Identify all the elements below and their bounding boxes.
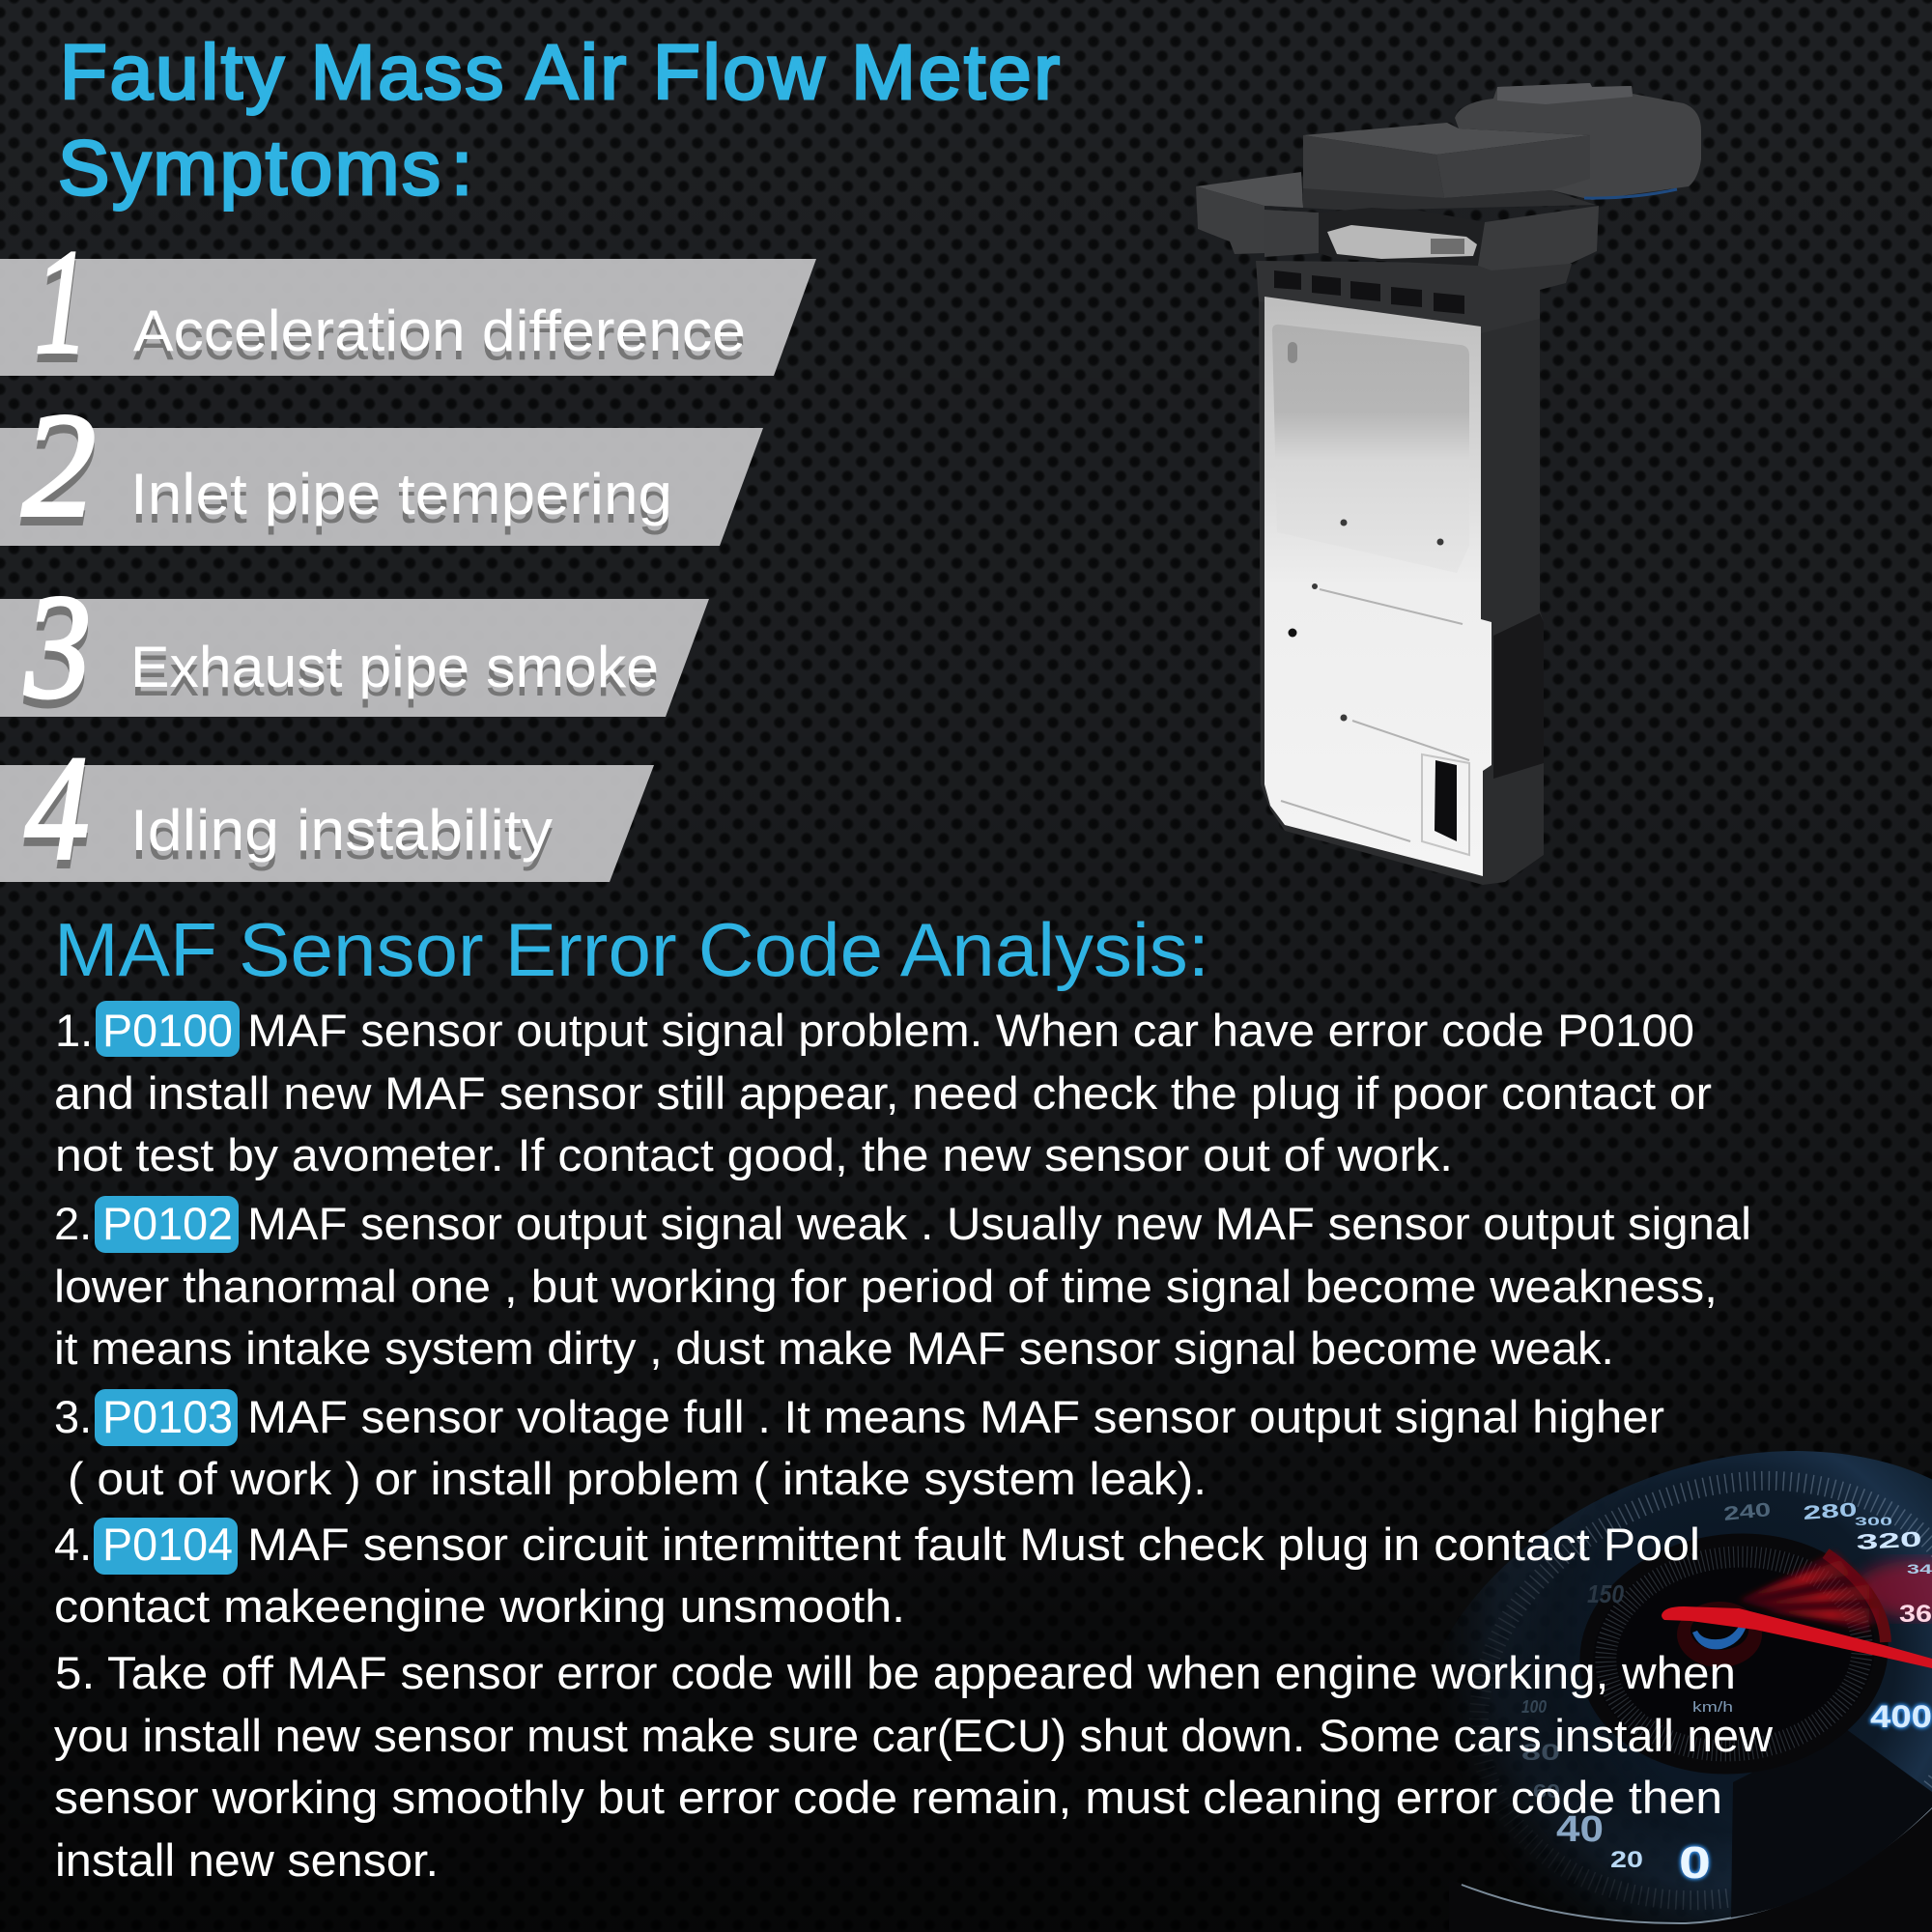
note 5: clearing error codes: 5. Take off MAF sensor error code will be appeared when engine working, when xyxy=(55,1647,1736,1698)
error code 2: P0102: 2. xyxy=(54,1198,92,1249)
title: Faulty Mass Air Flow Meter xyxy=(60,29,1060,115)
symptom 1 xyxy=(0,220,816,393)
error code 2: P0102: it means intake system dirty , dust make MAF sensor signal become weak. xyxy=(54,1322,1614,1374)
error code 3: P0103: ( out of work ) or install problem ( intake system leak). xyxy=(68,1453,1207,1504)
symptom 3: 3 xyxy=(24,565,91,729)
symptom 4 xyxy=(0,726,654,899)
symptom 1: 1 xyxy=(35,229,88,393)
sensor disc xyxy=(1327,225,1477,259)
gauge scale numbers: 300 xyxy=(1855,1515,1893,1528)
gauge scale numbers: 36 xyxy=(1899,1601,1932,1628)
error code 4: P0104 xyxy=(54,1518,1700,1632)
gauge scale numbers: 320 xyxy=(1856,1526,1922,1554)
gauge red ring section xyxy=(1826,1553,1886,1642)
note 5: clearing error codes: you install new sensor must make sure car(ECU) shut down. Some cars install new xyxy=(54,1710,1774,1761)
gauge dark wedge xyxy=(1731,1726,1932,1918)
symptom 4: 4 xyxy=(25,735,89,899)
title xyxy=(58,29,1060,211)
sensor neck with slots xyxy=(1256,261,1572,333)
plate window frame xyxy=(1422,754,1469,855)
gauge red glow at right xyxy=(1855,1560,1932,1618)
error code 1: P0100: not test by avometer. If contact good, the new sensor out of work. xyxy=(55,1129,1453,1180)
gauge needle xyxy=(1662,1606,1932,1668)
symptom 2: 2 xyxy=(22,392,96,556)
plate base xyxy=(1264,297,1492,876)
badge P0103: P0103 xyxy=(102,1391,233,1442)
symptom 1: Acceleration difference xyxy=(133,298,746,363)
plate rivets xyxy=(1288,342,1443,721)
error code 3: P0103 xyxy=(54,1389,1664,1504)
gauge scale numbers: 150 xyxy=(1587,1579,1624,1608)
plate upper panel xyxy=(1272,325,1469,573)
error code 3: P0103: 3. xyxy=(54,1391,92,1442)
error code 1: P0100: 1. xyxy=(55,1005,93,1056)
gauge area below rim xyxy=(1449,1807,1932,1932)
note 5: clearing error codes xyxy=(54,1647,1774,1886)
title: Symptoms xyxy=(58,125,440,211)
gauge tick ring xyxy=(1470,1470,1932,1910)
symptom 3: Exhaust pipe smoke xyxy=(130,643,659,708)
sensor metal plate xyxy=(1264,297,1492,876)
symptom 2: Inlet pipe tempering xyxy=(130,470,672,535)
error code 2: P0102 xyxy=(54,1196,1751,1374)
gauge scale numbers: 400 xyxy=(1870,1699,1932,1734)
gauge scale numbers: 280 xyxy=(1803,1499,1858,1524)
gauge scale numbers: 20 xyxy=(1610,1847,1643,1873)
gauge scale numbers: 240 xyxy=(1722,1499,1772,1525)
symptom 1: 1 xyxy=(35,220,88,384)
note 5: clearing error codes: sensor working smoothly but error code remain, must cleaning error code then xyxy=(54,1772,1722,1823)
sensor connector plug xyxy=(1455,83,1701,200)
gauge inner ring xyxy=(1576,1526,1892,1781)
gauge scale numbers: 60 xyxy=(1533,1781,1560,1803)
error code 4: P0104: MAF sensor circuit intermittent fault Must check plug in contact Pool xyxy=(247,1519,1700,1570)
error code 4: P0104: contact makeengine working unsmooth. xyxy=(54,1580,905,1632)
gauge scale numbers: 80 xyxy=(1521,1740,1560,1766)
gauge scale numbers: km/h xyxy=(1692,1699,1733,1716)
gauge outer dial xyxy=(1459,1451,1932,1922)
speedometer gauge xyxy=(1459,1451,1932,1924)
gauge red rays xyxy=(1739,1550,1879,1633)
gauge scale numbers xyxy=(1521,1499,1932,1888)
symptom 3: 3 xyxy=(24,574,91,738)
plate seams xyxy=(1281,589,1469,841)
gauge scale numbers: 40 xyxy=(1556,1809,1604,1850)
gauge inner tick ring xyxy=(1596,1545,1872,1763)
sensor stem body xyxy=(1259,285,1544,885)
symptom 2 xyxy=(0,384,763,556)
gauge scale numbers: 34 xyxy=(1907,1561,1932,1577)
symptom 3: Exhaust pipe smoke xyxy=(130,635,659,699)
sensor left flange xyxy=(1196,172,1303,254)
gauge scale numbers: 100 xyxy=(1521,1697,1547,1717)
symptom 4: 4 xyxy=(25,726,89,891)
symptom 1: Acceleration difference xyxy=(133,307,746,372)
MAF sensor product illustration xyxy=(1196,83,1701,885)
gauge hub xyxy=(1677,1602,1762,1667)
title: : xyxy=(451,125,472,211)
badge P0102: P0102 xyxy=(102,1198,233,1249)
gauge outer rim line xyxy=(1462,1807,1932,1923)
error code 3: P0103: MAF sensor voltage full . It means MAF sensor output signal higher xyxy=(247,1391,1664,1442)
error code 1: P0100: MAF sensor output signal problem. When car have error code P0100 xyxy=(247,1005,1694,1056)
symptom 4: Idling instability xyxy=(130,807,553,871)
badge P0100: P0100 xyxy=(102,1005,233,1056)
plate window xyxy=(1435,760,1457,841)
error code 4: P0104: 4. xyxy=(54,1519,92,1570)
symptom 3 xyxy=(0,565,709,738)
error code 1: P0100 xyxy=(54,1001,1712,1180)
panel: symptoms list xyxy=(0,220,816,899)
symptom 4: Idling instability xyxy=(130,798,553,863)
symptom 2: 2 xyxy=(22,384,96,548)
sensor housing block xyxy=(1303,123,1596,211)
badge P0104: P0104 xyxy=(102,1519,233,1570)
gauge scale numbers: 0 xyxy=(1679,1837,1711,1888)
error code 2: P0102: lower thanormal one , but working for period of time signal become weakness, xyxy=(54,1261,1718,1312)
sensor flange front xyxy=(1264,206,1599,270)
section heading: error code analysis: MAF Sensor Error Code Analysis: xyxy=(54,907,1209,992)
error code 2: P0102: MAF sensor output signal weak . Usually new MAF sensor output signal xyxy=(247,1198,1751,1249)
note 5: clearing error codes: install new sensor. xyxy=(55,1834,439,1886)
error code 1: P0100: and install new MAF sensor still appear, need check the plug if poor contact or xyxy=(54,1067,1712,1119)
symptom 2: Inlet pipe tempering xyxy=(130,462,672,526)
